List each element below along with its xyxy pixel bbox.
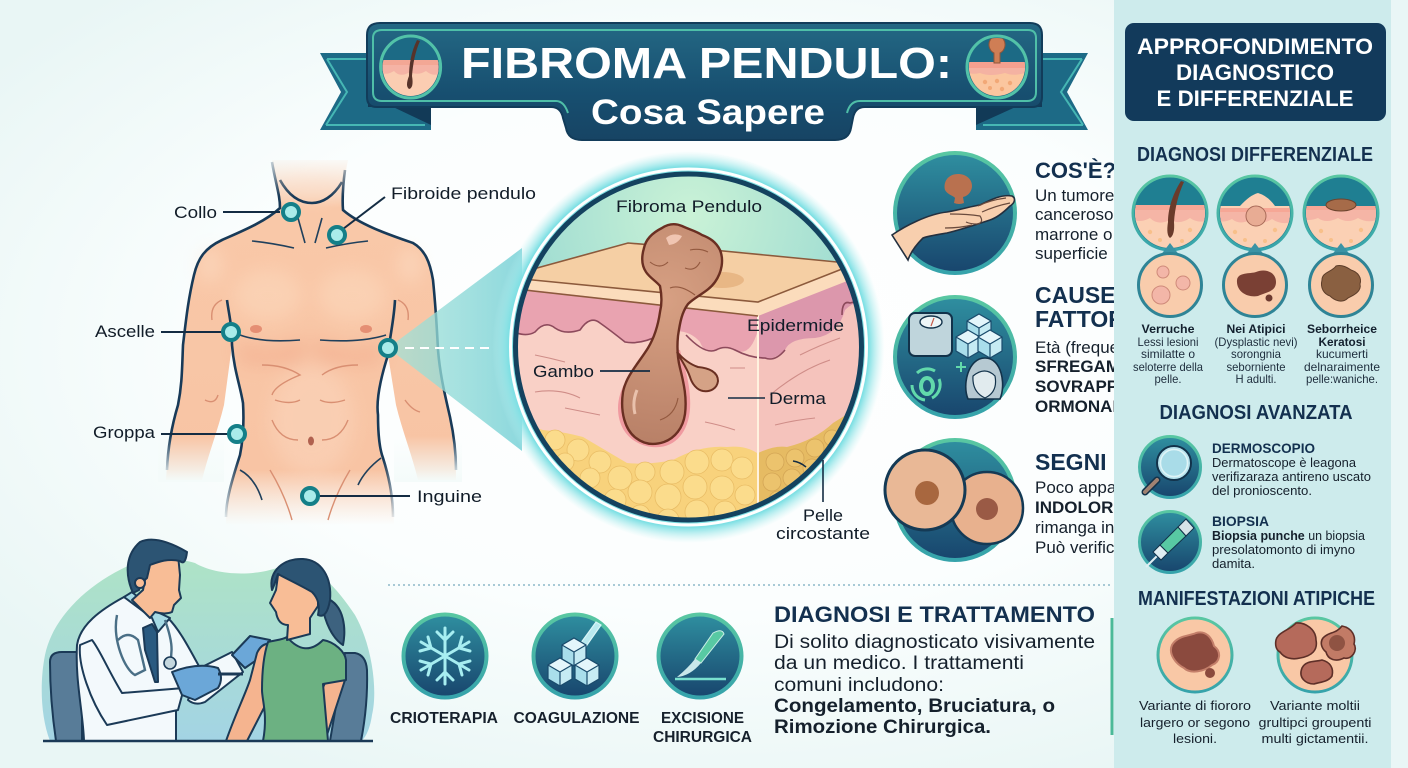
icon: hand holding growth <box>892 153 1015 273</box>
body text: SOVRAPPESO <box>1035 377 1154 396</box>
doctor and patient illustration <box>42 540 374 741</box>
body text <box>1035 478 1176 557</box>
treatment: crioterapia <box>390 614 498 727</box>
section: segni e sintomi <box>885 440 1230 560</box>
panel header: E DIFFERENZIALE <box>1156 86 1354 111</box>
atypical: single large <box>1139 618 1251 746</box>
caption: Lessi lesioni <box>1138 335 1198 349</box>
lens label: Fibroma Pendulo <box>616 197 762 216</box>
body text: Può verificarsi <box>1035 538 1142 557</box>
skin layers <box>518 176 859 518</box>
muscle shading <box>198 180 422 475</box>
differential: verruche <box>1130 176 1210 386</box>
label Gambo: Gambo <box>533 362 594 381</box>
label Epidermide: Epidermide <box>747 316 844 335</box>
zoom cone connector <box>380 248 522 451</box>
medallion left: hair follicle <box>380 36 442 100</box>
doctor <box>77 540 270 741</box>
item: biopsia <box>1140 512 1366 572</box>
cropped accent <box>1110 618 1114 735</box>
text: BIOPSIA <box>1212 513 1269 529</box>
icon: cross-section <box>1215 176 1295 255</box>
caption: Variante moltii <box>1270 698 1360 713</box>
body outline <box>167 162 456 517</box>
small side lobe <box>677 352 718 391</box>
text: del pronioscento. <box>1212 483 1312 498</box>
body text: Rimozione Chirurgica. <box>774 717 991 738</box>
label: CHIRURGICA <box>653 729 752 746</box>
caption: largero or segono <box>1140 715 1250 730</box>
section: cause e fattori <box>895 282 1167 417</box>
body text: Di solito diagnosticato visivamente <box>774 632 1095 653</box>
body text <box>1035 338 1167 416</box>
text: DERMOSCOPIO <box>1212 440 1315 456</box>
caption: Variante di fiororo <box>1139 698 1251 713</box>
treatment: coagulazione <box>514 614 640 727</box>
patient <box>226 559 346 741</box>
heading <box>1035 282 1137 332</box>
icon: snowflake <box>404 614 486 698</box>
icon: skin tag close-ups <box>885 440 1023 560</box>
caption: (Dysplastic nevi) <box>1214 335 1298 349</box>
dermis fibres <box>535 338 840 430</box>
icon: risk factors <box>895 297 1015 417</box>
caption <box>1214 322 1298 386</box>
icon: large lesion <box>1158 618 1232 692</box>
body text: Età (frequente <box>1035 338 1143 357</box>
caption: seborniente <box>1226 360 1286 374</box>
caption <box>1258 698 1372 746</box>
text: presolatomonto di imyno <box>1212 542 1355 557</box>
title text: FIBROMA PENDULO: <box>461 39 952 88</box>
caption: Verruche <box>1142 322 1195 336</box>
label Derma <box>728 389 827 408</box>
chairs <box>50 652 82 741</box>
green blob background <box>42 559 374 741</box>
pointer <box>1160 243 1180 256</box>
differential: nei atipici <box>1214 176 1298 386</box>
caption <box>1304 322 1380 386</box>
caption: H adulti. <box>1236 372 1276 386</box>
fat layer <box>539 428 757 518</box>
caption: lesioni. <box>1173 731 1217 746</box>
label Gambo <box>533 362 650 381</box>
lens ring <box>516 174 862 520</box>
text: damita. <box>1212 556 1255 571</box>
atypical: multiple clusters <box>1258 618 1372 746</box>
icon: syringe <box>1140 512 1200 572</box>
arm fade left <box>158 436 224 482</box>
magnified skin cross-section <box>492 151 884 543</box>
caption: multi gictamentii. <box>1262 731 1368 746</box>
body text <box>774 632 1095 738</box>
body text: SFREGAMENTO <box>1035 357 1167 376</box>
polyp pink halo <box>618 345 690 447</box>
heading: SEGNI E SINTOMI <box>1035 449 1230 475</box>
label: COAGULAZIONE <box>514 710 640 727</box>
body text: Un tumore <box>1035 186 1114 205</box>
label: CRIOTERAPIA <box>390 710 498 727</box>
polyp highlights <box>666 234 682 245</box>
heading: FATTORI <box>1035 306 1131 332</box>
icon: cross-section <box>1300 176 1380 256</box>
body text <box>1035 186 1114 263</box>
caption: Nei Atipici <box>1226 322 1286 336</box>
heading: DIAGNOSI E TRATTAMENTO <box>774 602 1095 627</box>
panel header: DIAGNOSTICO <box>1176 60 1334 85</box>
stalk and head <box>622 224 722 444</box>
lens glow <box>492 151 884 543</box>
label Groppa <box>93 423 245 442</box>
label Inguine: Inguine <box>417 487 482 506</box>
heading: diagnosi differenziale: DIAGNOSI DIFFERENZIALE <box>1137 144 1373 166</box>
pointer <box>1331 243 1351 256</box>
torso silhouette <box>166 160 456 525</box>
label Ascelle: Ascelle <box>95 322 155 341</box>
nipples and navel <box>250 325 262 333</box>
label Collo <box>174 203 299 222</box>
body diagram <box>93 160 536 525</box>
muscle lines <box>240 218 386 500</box>
medallion right: skin tag <box>966 36 1028 98</box>
label Groppa: Groppa <box>93 423 156 442</box>
label: EXCISIONE <box>661 710 744 727</box>
body text: ORMONALI <box>1035 397 1128 416</box>
icon: cross-section <box>1130 176 1210 255</box>
treatment: excisione chirurgica <box>653 614 752 746</box>
heading: CAUSE E <box>1035 282 1137 308</box>
icon: keratosis <box>1310 254 1372 316</box>
caption: Seborrheice <box>1307 322 1377 336</box>
stethoscope <box>116 615 172 675</box>
text <box>1212 440 1371 498</box>
panel header: APPROFONDIMENTO <box>1137 34 1373 59</box>
icon: magnifier <box>1140 436 1200 498</box>
label Pelle circostante <box>776 460 870 543</box>
caption: pelle. <box>1154 372 1182 386</box>
body text: marrone o <box>1035 225 1112 244</box>
banner title <box>320 23 1088 140</box>
caption <box>1133 322 1203 386</box>
subtitle text: Cosa Sapere <box>591 93 825 132</box>
heading: COS'È? <box>1035 158 1116 183</box>
body text: Poco appariscente <box>1035 478 1176 497</box>
label Fibroide pendulo <box>329 184 536 243</box>
text: Biopsia punche un biopsia <box>1212 528 1366 543</box>
panel header <box>1125 23 1386 121</box>
heading: diagnosi avanzata: DIAGNOSI AVANZATA <box>1160 402 1352 424</box>
section: cos'e <box>892 153 1116 273</box>
label Inguine <box>302 487 482 506</box>
body text: INDOLORI <box>1035 498 1118 517</box>
differential: seborrheice keratosi <box>1300 176 1380 386</box>
ribbon tail right <box>976 53 1088 130</box>
dermis <box>518 321 757 464</box>
body text: superficie <box>1035 244 1108 263</box>
caption: sorongnia <box>1231 347 1281 361</box>
text <box>1212 513 1366 571</box>
floor line <box>43 740 373 742</box>
section: diagnosi e trattamento <box>774 602 1112 738</box>
icon: scalpel <box>658 614 742 698</box>
body text: comuni includono: <box>774 675 944 696</box>
text: Dermatoscope è leagona <box>1212 455 1357 470</box>
icon: clustered lesions <box>1276 618 1355 692</box>
label Derma: Derma <box>769 389 827 408</box>
pointer <box>1245 243 1265 256</box>
arm fade right <box>394 436 462 482</box>
body text: canceroso <box>1035 205 1113 224</box>
banner main plate <box>367 23 1042 140</box>
panel background <box>1114 0 1391 768</box>
caption: pelle:waniche. <box>1306 372 1378 386</box>
item: dermoscopio <box>1140 436 1371 498</box>
ribbon tail left <box>320 53 431 130</box>
dotted divider <box>388 584 1113 586</box>
icon: cubes and probe <box>534 614 616 698</box>
caption: kucumerti <box>1316 347 1368 361</box>
caption: grultipci groupenti <box>1258 715 1372 730</box>
margin strip <box>1391 0 1408 768</box>
body text: rimanga invariato <box>1035 518 1165 537</box>
label Pelle circostante: Pelle <box>803 506 843 525</box>
icon: warts <box>1138 254 1202 316</box>
epidermis wavy layer <box>518 290 757 352</box>
icon: atypical nevus <box>1224 254 1286 316</box>
top skin surface <box>532 244 840 302</box>
caption: delnaraimente <box>1304 360 1380 374</box>
body text: da un medico. I trattamenti <box>774 653 1024 674</box>
label Collo: Collo <box>174 203 217 222</box>
label Ascelle <box>95 322 239 341</box>
heading: manifestazioni atipiche: MANIFESTAZIONI ATIPICHE <box>1138 588 1375 610</box>
sidebar: approfondimento <box>1114 0 1408 768</box>
label Fibroide pendulo: Fibroide pendulo <box>391 184 536 203</box>
label Pelle circostante: circostante <box>776 524 870 543</box>
caption <box>1139 698 1251 746</box>
label <box>653 710 752 746</box>
caption: seloterre della <box>1133 360 1203 374</box>
body text: Congelamento, Bruciatura, o <box>774 696 1055 717</box>
caption: Keratosi <box>1318 335 1366 349</box>
caption: similatte o <box>1141 347 1195 361</box>
text: verifizaraza antireno uscato <box>1212 469 1371 484</box>
